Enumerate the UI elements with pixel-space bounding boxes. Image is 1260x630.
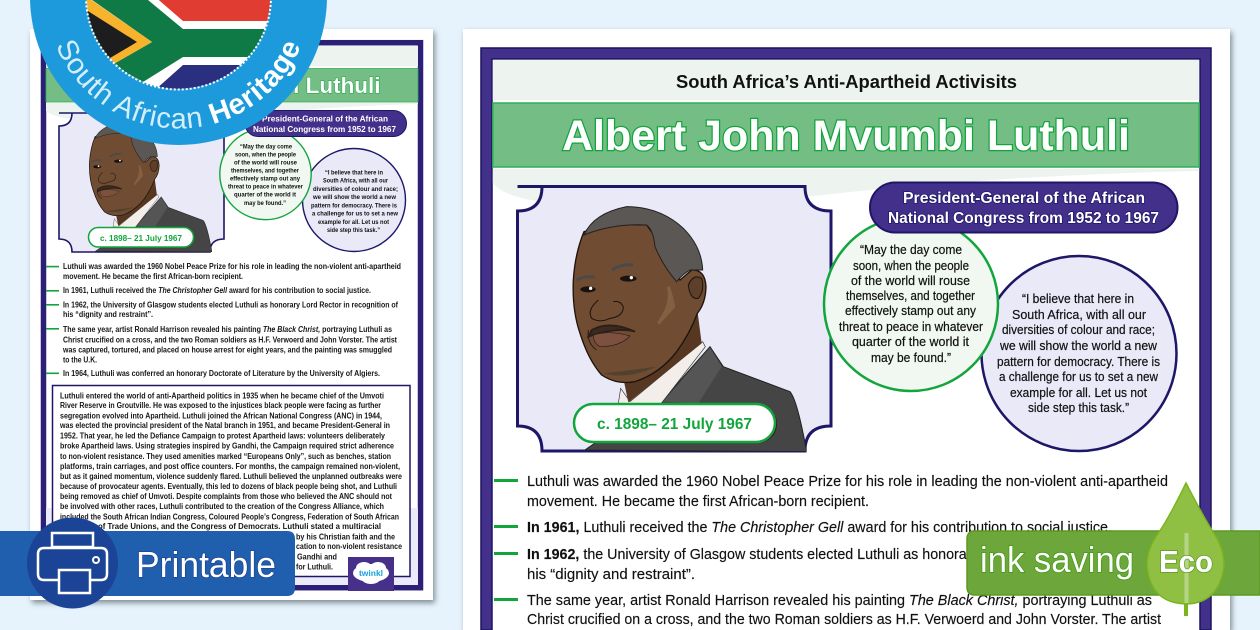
lower header curve (46, 103, 418, 123)
biography text: Congress of Trade Unions, and the Congress of Democrats. Luthuli stated a multiracial (60, 522, 381, 531)
biography text: but as it gained momentum, violence suddenly flared. Luthuli believed the unplanned outbreaks were (60, 472, 403, 481)
quote text: diversities of colour and race; (1002, 322, 1155, 337)
quote text: threat to peace in whatever (228, 184, 303, 190)
date pill (574, 404, 777, 443)
portrait frame (518, 186, 831, 451)
quote text: may be found.” (244, 200, 286, 207)
quote circle navy (982, 256, 1176, 451)
quote text: example for all. Let us not (318, 219, 390, 226)
quote text: pattern for democracy. There is (311, 202, 397, 210)
portrait frame (59, 113, 224, 252)
badge text: South African Heritage (58, 40, 299, 129)
panel: left poster preview (30, 29, 433, 600)
bullet list: movement. He became the first African-born recipient. (527, 493, 869, 510)
eco text: Eco (1159, 544, 1213, 579)
badge: Printable (0, 518, 295, 608)
biography text: broke Apartheid laws. Using strategies inspired by Gandhi, the Campaign required strict adherence (60, 442, 395, 450)
role text: President-General of the African (903, 190, 1145, 207)
bullet list: was captured, tortured, and placed on house arrest for eight years, and the painting was smuggled (62, 346, 392, 354)
quote text: South Africa, with all our (323, 178, 388, 184)
bullet list: In 1962, the University of Glasgow students elected Luthuli as honorary Lord Rector in recognition of (63, 300, 398, 310)
quote text: we will show the world a new (999, 338, 1158, 353)
twinkl logo (348, 557, 394, 591)
title band (493, 103, 1199, 167)
printer icon (27, 518, 118, 608)
dates: c. 1898– 21 July 1967 (597, 416, 752, 433)
label: ink saving (980, 539, 1134, 580)
quote text: of the world will rouse (851, 273, 970, 288)
biography text: to non-violent resistance. They used amenities marked “Europeans Only”, such as benches, station (60, 452, 391, 461)
portrait of Luthuli (89, 123, 212, 252)
bullet list: Christ crucified on a cross, and the two Roman soldiers as H.F. Verwoerd and John Vorster. The artist (63, 336, 397, 344)
quote text: of the world will rouse (234, 160, 297, 166)
lower lavender tint (46, 508, 418, 585)
bullet list: In 1961, Luthuli received the The Christopher Gell award for his contribution to social justice. (527, 519, 1112, 536)
biography text: Gandhi and (297, 552, 337, 562)
biography box (52, 386, 410, 576)
quote text: example for all. Let us not (1010, 385, 1147, 400)
header background (493, 60, 1199, 100)
quote text: soon, when the people (235, 152, 296, 158)
bullet list: Luthuli was awarded the 1960 Nobel Peace Prize for his role in leading the non-violent anti-apartheid (63, 262, 401, 271)
header background (46, 46, 418, 66)
role pill (245, 110, 406, 136)
biography text: for Luthuli. (296, 562, 333, 572)
quote text: effectively stamp out any (230, 176, 300, 182)
quote text: themselves, and together (846, 288, 976, 303)
biography text (59, 392, 403, 572)
bullet list: The same year, artist Ronald Harrison revealed his painting The Black Christ, portraying Luthuli as (527, 592, 1152, 609)
label: Printable (136, 544, 276, 585)
bullet list (46, 262, 401, 378)
bullet list: Christ crucified on a cross, and the two Roman soldiers as H.F. Verwoerd and John Vorster. The artist (527, 611, 1162, 628)
biography text: platforms, train carriages, and post office counters. For months, the campaign remained non-violent, (60, 462, 400, 471)
quote text: threat to peace in whatever (839, 319, 984, 334)
quote text (228, 144, 303, 207)
biography text: was elected the provincial president of the Natal branch in 1951, and became President-General in (59, 421, 390, 430)
quote text (311, 170, 399, 234)
dates: c. 1898– 21 July 1967 (100, 234, 183, 243)
quote text: South Africa, with all our (1012, 307, 1147, 322)
bullet list: his “dignity and restraint”. (527, 566, 695, 583)
quote circle green (824, 217, 998, 391)
quote text: diversities of colour and race; (313, 186, 398, 193)
bullet list: movement. He became the first African-born recipient. (63, 272, 243, 281)
quote text: a challenge for us to set a new (999, 369, 1159, 384)
quote text: side step this task.” (1028, 400, 1129, 415)
portrait of Luthuli (573, 207, 807, 452)
twinkl logo: twinkl (359, 568, 383, 578)
bullet list: In 1964, Luthuli was conferred an honorary Doctorate of Literature by the University of Algiers. (63, 369, 380, 378)
biography text: River Reserve in Groutville. He was exposed to the injustices black people were facing as further (60, 401, 381, 410)
title: Albert John Mvumbi Luthuli (562, 112, 1130, 160)
badge: ink saving Eco (967, 483, 1260, 616)
biography text: be involved with other races, Luthuli contributed to the creation of the Congress Alliance, which (60, 502, 384, 511)
flag dotted edge (86, 0, 271, 90)
quote circle green (220, 128, 311, 220)
quote circle navy (302, 148, 406, 252)
poster sheet (30, 29, 433, 600)
quote text: side step this task.” (327, 227, 380, 234)
role text: President-General of the African (262, 114, 388, 124)
title band (46, 68, 418, 102)
quote text: soon, when the people (853, 258, 969, 273)
role text: National Congress from 1952 to 1967 (888, 210, 1159, 227)
biography text: Luthuli entered the world of anti-Apartheid politics in 1935 when he became chief of the Umvoti (60, 392, 384, 400)
flag of South Africa (86, 0, 270, 89)
biography text: by his Christian faith and the (296, 532, 396, 542)
bullet list: In 1962, the University of Glasgow students elected Luthuli as honorary Lord Rector in recognition of (527, 546, 1163, 563)
quote text (997, 291, 1160, 415)
quote text: effectively stamp out any (845, 303, 977, 318)
poster sheet (463, 29, 1230, 630)
quote text: “I believe that here in (325, 170, 383, 176)
lower header curve (493, 169, 1199, 205)
quote text: quarter of the world it (852, 334, 969, 349)
quote text: quarter of the world it (234, 192, 297, 198)
bullet list: to the U.K. (63, 356, 97, 364)
quote text: “May the day come (240, 144, 292, 150)
subtitle: South Africa’s Anti-Apartheid Activisits (676, 71, 1017, 92)
quote text: themselves, and together (231, 168, 299, 174)
biography text: being removed as chief of Umvoti. Despite complaints from those who believed the ANC should not (60, 492, 392, 501)
quote text (839, 242, 984, 365)
role text: National Congress from 1952 to 1967 (253, 125, 396, 134)
badge: South African Heritage (30, 0, 327, 145)
panel: right poster preview (463, 29, 1230, 630)
date pill (88, 228, 194, 247)
bullet list: In 1961, Luthuli received the The Christopher Gell award for his contribution to social justice. (63, 286, 371, 295)
bullet list (494, 473, 1168, 628)
biography text: 1952. That year, he led the Defiance Campaign to protest Apartheid laws: volunteers deliberately (60, 432, 386, 440)
subtitle: South Africa’s Anti-Apartheid Activisits (132, 53, 312, 64)
role pill (870, 182, 1178, 232)
quote text: “I believe that here in (1022, 291, 1134, 306)
quote text: may be found.” (871, 350, 951, 365)
leaf icon (1147, 483, 1224, 616)
biography text: because of provocateur agents. Eventually, this led to dozens of black people being shot, and Luthuli (60, 482, 397, 491)
biography text: cation to non-violent resistance (296, 542, 403, 551)
biography text: included the South African Indian Congress, Coloured People’s Congress, Federation of South African (60, 512, 399, 522)
poster border (481, 48, 1211, 630)
biography text: segregation evolved into Apartheid. Luthuli joined the African National Congress (ANC) in 1944, (60, 412, 382, 420)
bullet list: his “dignity and restraint”. (63, 310, 153, 319)
quote text: “May the day come (860, 242, 962, 257)
bullet list: Luthuli was awarded the 1960 Nobel Peace Prize for his role in leading the non-violent anti-apartheid (527, 473, 1168, 490)
quote text: pattern for democracy. There is (997, 354, 1160, 369)
title: Albert John Mvumbi Luthuli (84, 73, 380, 98)
quote text: we will show the world a new (312, 194, 397, 201)
bullet list: The same year, artist Ronald Harrison revealed his painting The Black Christ, portraying Luthuli as (63, 325, 392, 334)
quote text: a challenge for us to set a new (312, 210, 399, 218)
poster border (44, 43, 420, 588)
